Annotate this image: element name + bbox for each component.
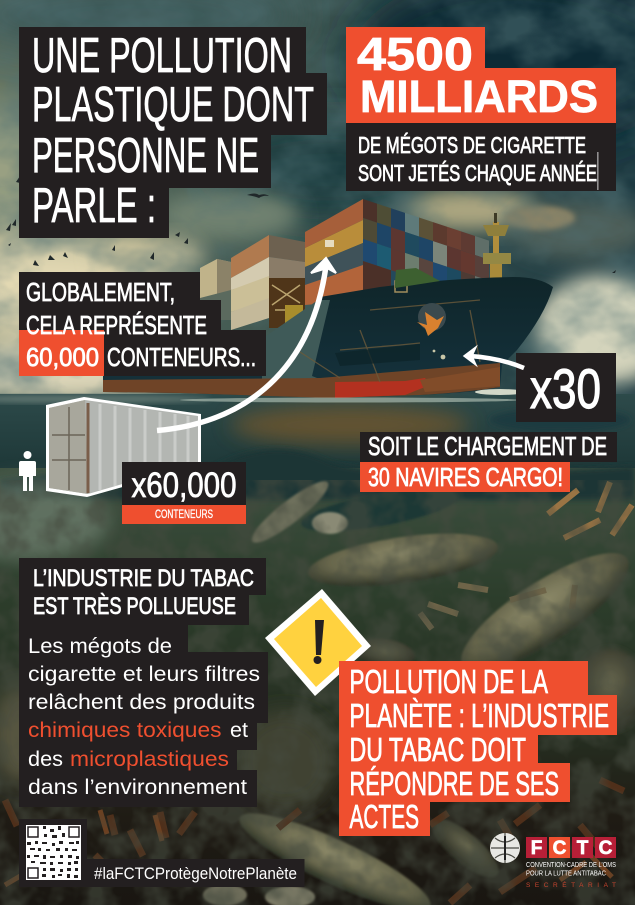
text block: 60,000 containers: GLOBALEMENT, <box>26 277 175 307</box>
background: sea surface <box>0 394 635 484</box>
hull <box>103 277 553 398</box>
main title block: PLASTIQUE DONT <box>32 78 314 132</box>
subheading: cigarette butts per year <box>346 123 616 191</box>
text block: 30 cargo ships: 30 NAVIRES CARGO! <box>368 464 563 492</box>
headline statistic: 4500 milliards: MILLIARDS <box>360 71 598 122</box>
logo: FCTC convention secretariat: SECRÉTARIAT <box>526 880 616 889</box>
container stack: far left <box>200 259 231 320</box>
arrow: x30 to ship <box>464 347 524 368</box>
logo: FCTC convention secretariat: POUR LA LUTTE ANTITABAC <box>526 868 606 878</box>
logo: FCTC convention secretariat <box>490 833 616 889</box>
main title block: UNE POLLUTION <box>32 29 292 83</box>
text block: toxic chemicals and microplastics: des <box>28 747 63 771</box>
icon: warning diamond <box>265 589 371 696</box>
heading: tobacco industry pollutes <box>19 558 266 625</box>
counter: x30: x30 <box>530 357 601 420</box>
text block: toxic chemicals and microplastics: relâchent des produits <box>28 690 255 714</box>
birds <box>6 176 616 273</box>
heading: tobacco industry pollutes: EST TRÈS POLLUEUSE <box>33 593 236 620</box>
container stack: main side faces <box>363 199 489 335</box>
mast tower <box>483 213 511 280</box>
FCTC wordmark tiles: C <box>599 838 613 859</box>
callout: industry must answer <box>339 661 617 836</box>
callout: industry must answer: ACTES <box>350 798 419 835</box>
illustration: container ship <box>103 199 553 402</box>
heading: tobacco industry pollutes: L’INDUSTRIE DU TABAC <box>33 565 254 592</box>
text block: toxic chemicals and microplastics: dans l’environnement <box>28 775 247 799</box>
hashtag: #laFCTCProtègeNotrePlanète <box>94 864 297 883</box>
text block: toxic chemicals and microplastics: et <box>230 718 248 742</box>
counter: x60,000 containers <box>122 462 246 524</box>
text block: 60,000 containers <box>19 272 266 376</box>
FCTC wordmark tiles: F <box>531 838 542 859</box>
text block: toxic chemicals and microplastics: microplastiques <box>70 747 229 771</box>
QR code panel <box>19 819 87 887</box>
main title block: PERSONNE NE <box>32 129 259 183</box>
FCTC wordmark tiles <box>526 837 616 859</box>
headline statistic: 4500 milliards <box>346 27 616 123</box>
text block: 30 cargo ships <box>360 432 617 492</box>
text block: toxic chemicals and microplastics: Les mégots de <box>28 634 172 658</box>
background: underwater with dead fish and cigarette butts <box>0 449 635 905</box>
text block: 60,000 containers: CELA REPRÉSENTE <box>26 310 207 340</box>
main title block <box>19 27 327 238</box>
text block: toxic chemicals and microplastics: cigarette et leurs filtres <box>28 662 260 686</box>
container stack: main front faces <box>305 199 363 305</box>
text block: toxic chemicals and microplastics: chimiques toxiques <box>28 718 222 742</box>
headline statistic: 4500 milliards: 4500 <box>357 28 473 80</box>
FCTC wordmark tiles: T <box>577 838 589 859</box>
background: stormy sky <box>0 0 635 400</box>
icon: human figure for scale <box>19 451 36 491</box>
text block: 60,000 containers: 60,000 <box>26 342 99 372</box>
text block: toxic chemicals and microplastics <box>19 625 268 807</box>
callout: industry must answer: POLLUTION DE LA <box>350 663 548 700</box>
container stack: middle <box>231 235 305 330</box>
icon: WHO emblem <box>490 833 520 863</box>
icon: shipping container <box>46 397 201 497</box>
FCTC wordmark tiles: C <box>553 838 567 859</box>
counter: x60,000 containers: CONTENEURS <box>155 509 213 521</box>
arrow: container to ship <box>157 258 336 430</box>
ship emblem <box>417 303 446 336</box>
hashtag <box>87 859 304 887</box>
main title block: PARLE : <box>32 179 156 233</box>
callout: industry must answer: DU TABAC DOIT <box>350 731 526 768</box>
text block: 60,000 containers: CONTENEURS... <box>107 342 256 372</box>
counter: x60,000 containers: x60,000 <box>132 466 236 505</box>
